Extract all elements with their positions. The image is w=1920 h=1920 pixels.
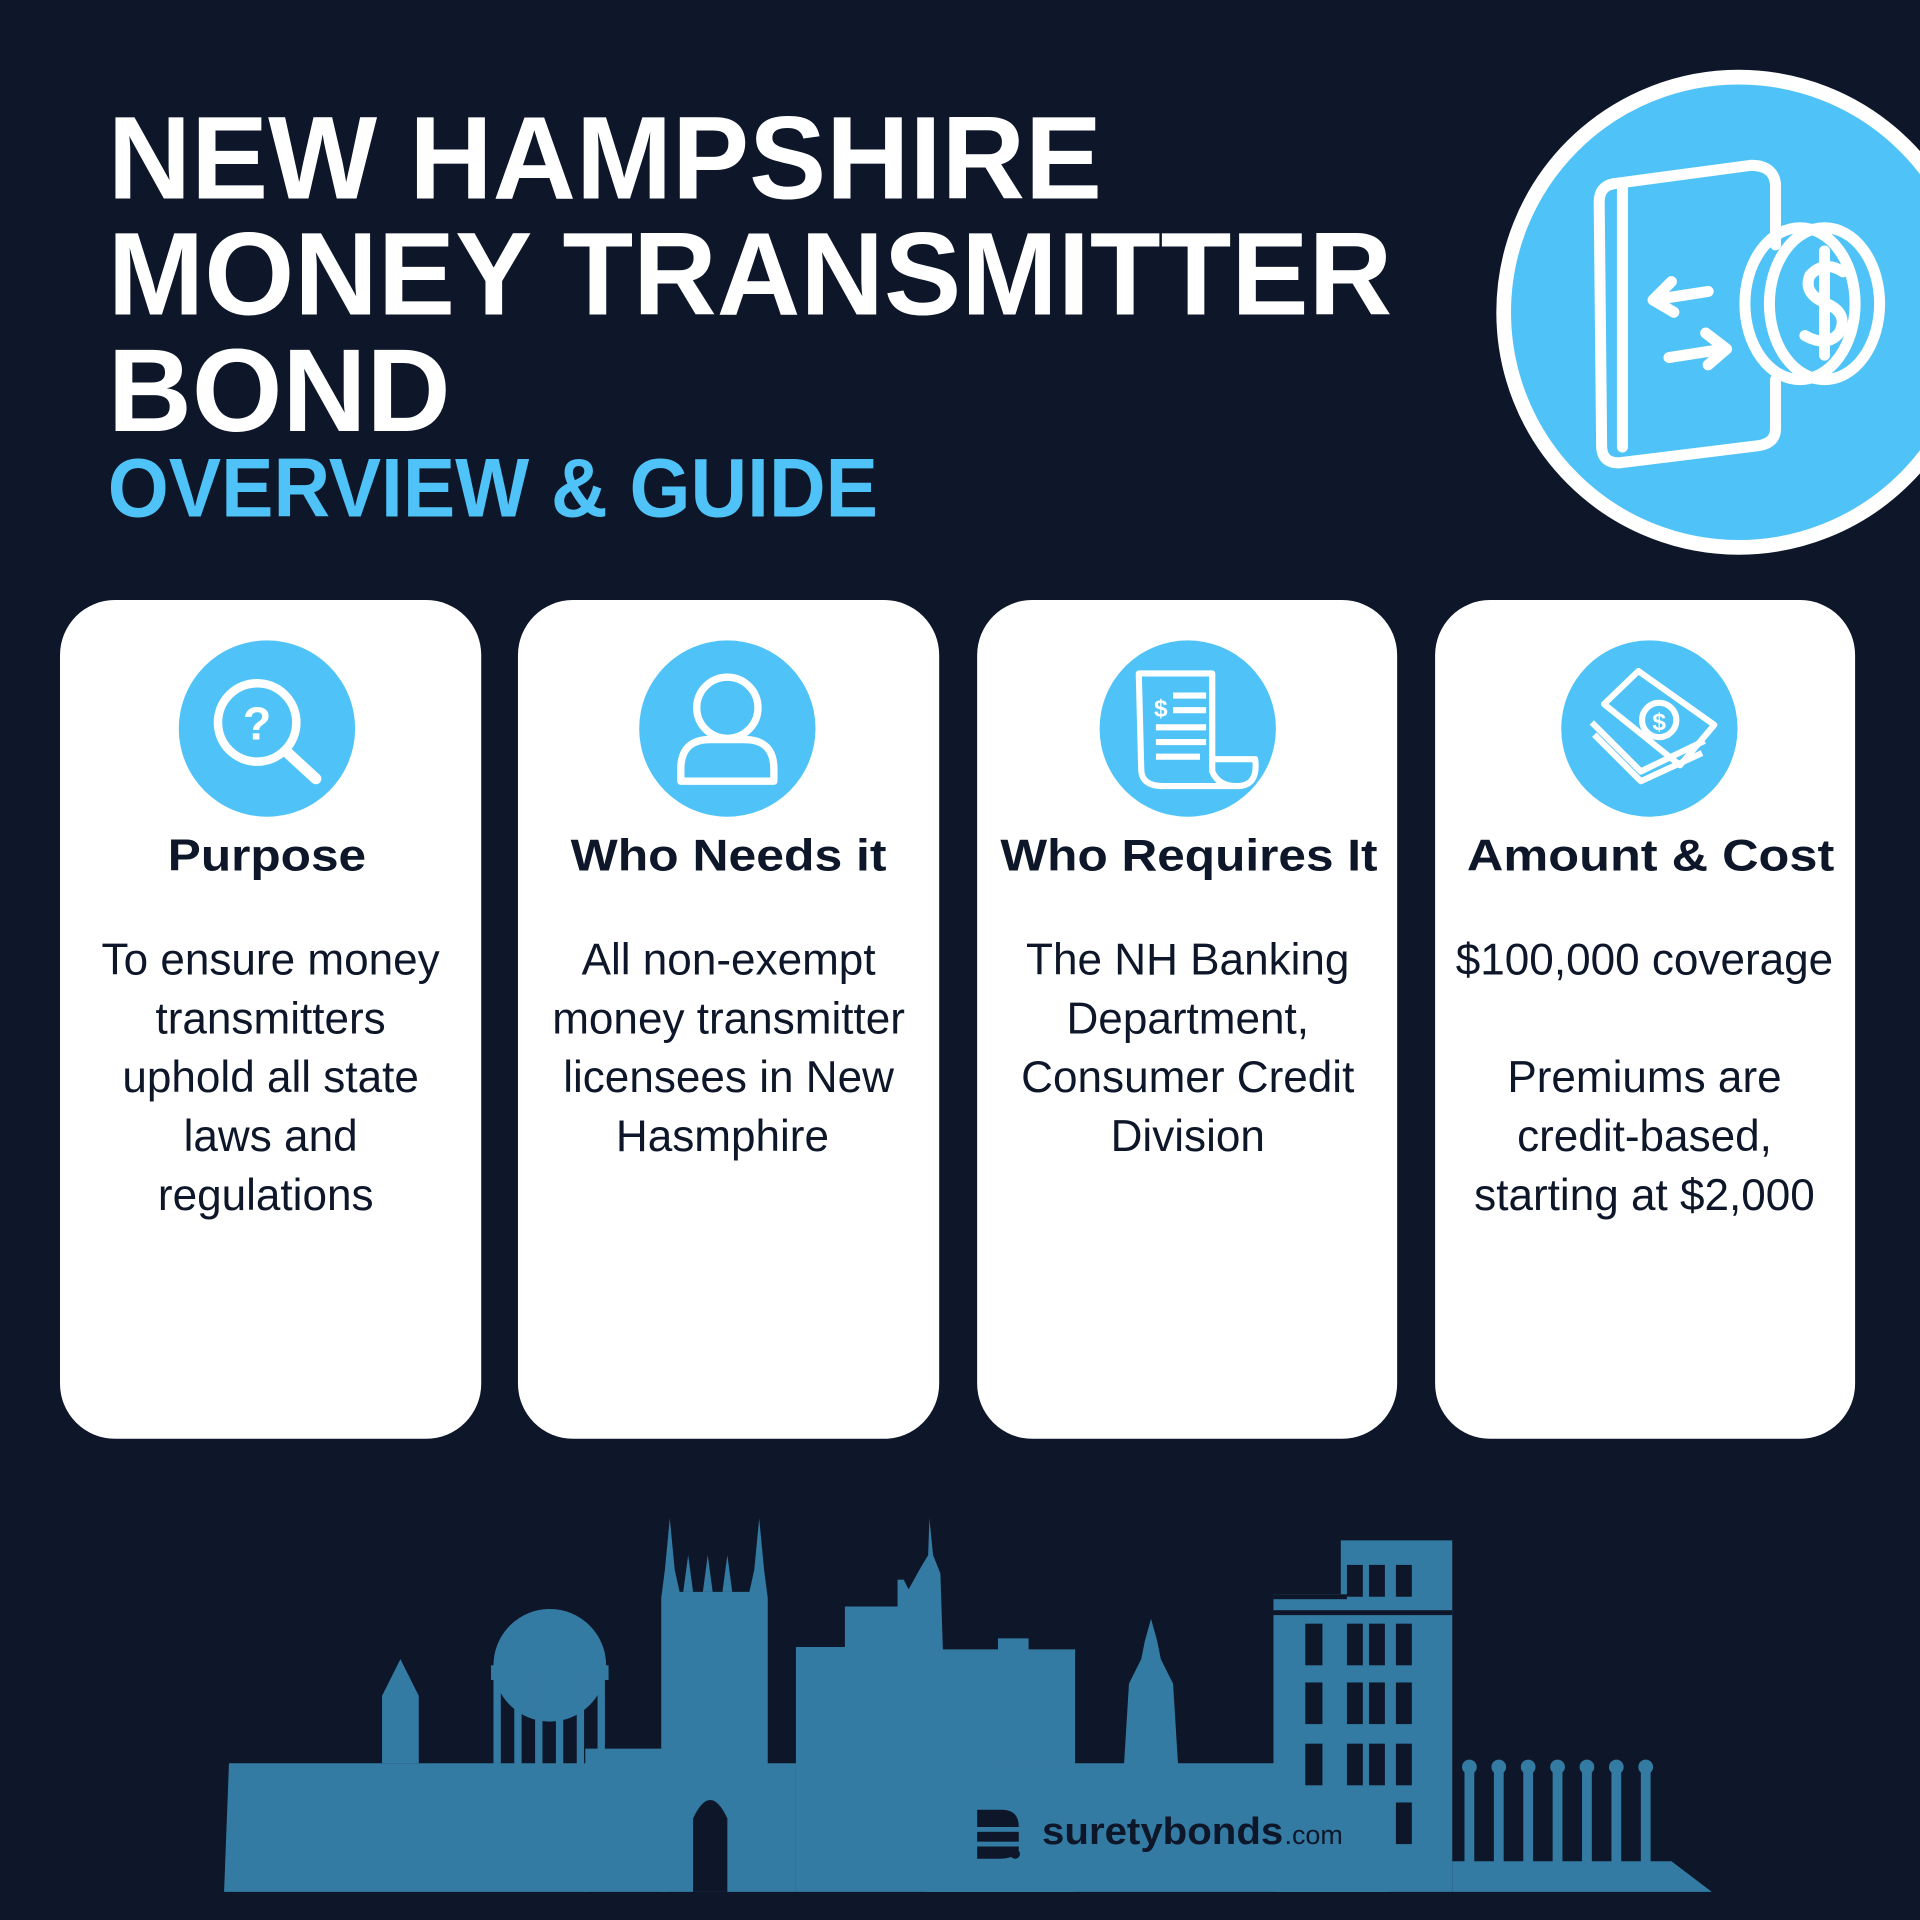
logo: suretybonds.com: .com — [1284, 1820, 1343, 1850]
panel: purpose — [60, 600, 481, 1439]
text block — [1456, 936, 1833, 1220]
subtitle: OVERVIEW & GUIDE — [108, 442, 878, 535]
text block: regulations — [158, 1171, 374, 1220]
text block: All non-exempt — [582, 936, 876, 985]
icon: person — [639, 640, 816, 817]
text block: money transmitter — [552, 994, 905, 1043]
title: MONEY TRANSMITTER — [108, 209, 1392, 340]
text block: licensees in New — [563, 1053, 894, 1102]
text block: laws and — [184, 1112, 358, 1161]
panel: amount and cost — [1435, 600, 1855, 1439]
text block: Consumer Credit — [1021, 1053, 1354, 1102]
text block: Department, — [1066, 994, 1309, 1043]
icon: phone money transfer circle — [1504, 77, 1920, 547]
text block: $100,000 coverage — [1456, 936, 1833, 985]
icon: banknotes — [1561, 640, 1738, 817]
icon: magnifier question — [179, 640, 355, 817]
heading: Purpose — [168, 832, 366, 881]
text block — [552, 936, 905, 1161]
panel: who requires it — [977, 600, 1397, 1439]
icon: receipt: $ — [1154, 695, 1168, 722]
text block: The NH Banking — [1026, 936, 1349, 985]
logo: suretybonds.com: suretybonds — [1042, 1811, 1283, 1853]
text block: uphold all state — [122, 1053, 419, 1102]
text block: To ensure money — [102, 936, 440, 985]
icon: banknotes: $ — [1652, 709, 1666, 736]
text block — [102, 936, 440, 1220]
text block: transmitters — [155, 994, 386, 1043]
icon: magnifier question: ? — [243, 698, 271, 750]
logo: suretybonds.com — [977, 1810, 1343, 1859]
text block: Division — [1111, 1112, 1265, 1161]
title — [108, 92, 1392, 456]
text block: Premiums are — [1507, 1053, 1782, 1102]
panel: who needs it — [518, 600, 939, 1439]
skyline illustration — [224, 1518, 1712, 1892]
text block: Hasmphire — [616, 1112, 829, 1161]
heading: Amount & Cost — [1467, 832, 1835, 881]
title: BOND — [108, 325, 451, 456]
icon: receipt — [1100, 640, 1276, 817]
text block: starting at $2,000 — [1474, 1171, 1815, 1220]
title: NEW HAMPSHIRE — [108, 92, 1102, 223]
text block: credit-based, — [1517, 1112, 1772, 1161]
text block — [1021, 936, 1354, 1161]
heading: Who Requires It — [1000, 832, 1378, 881]
heading: Who Needs it — [571, 832, 887, 881]
